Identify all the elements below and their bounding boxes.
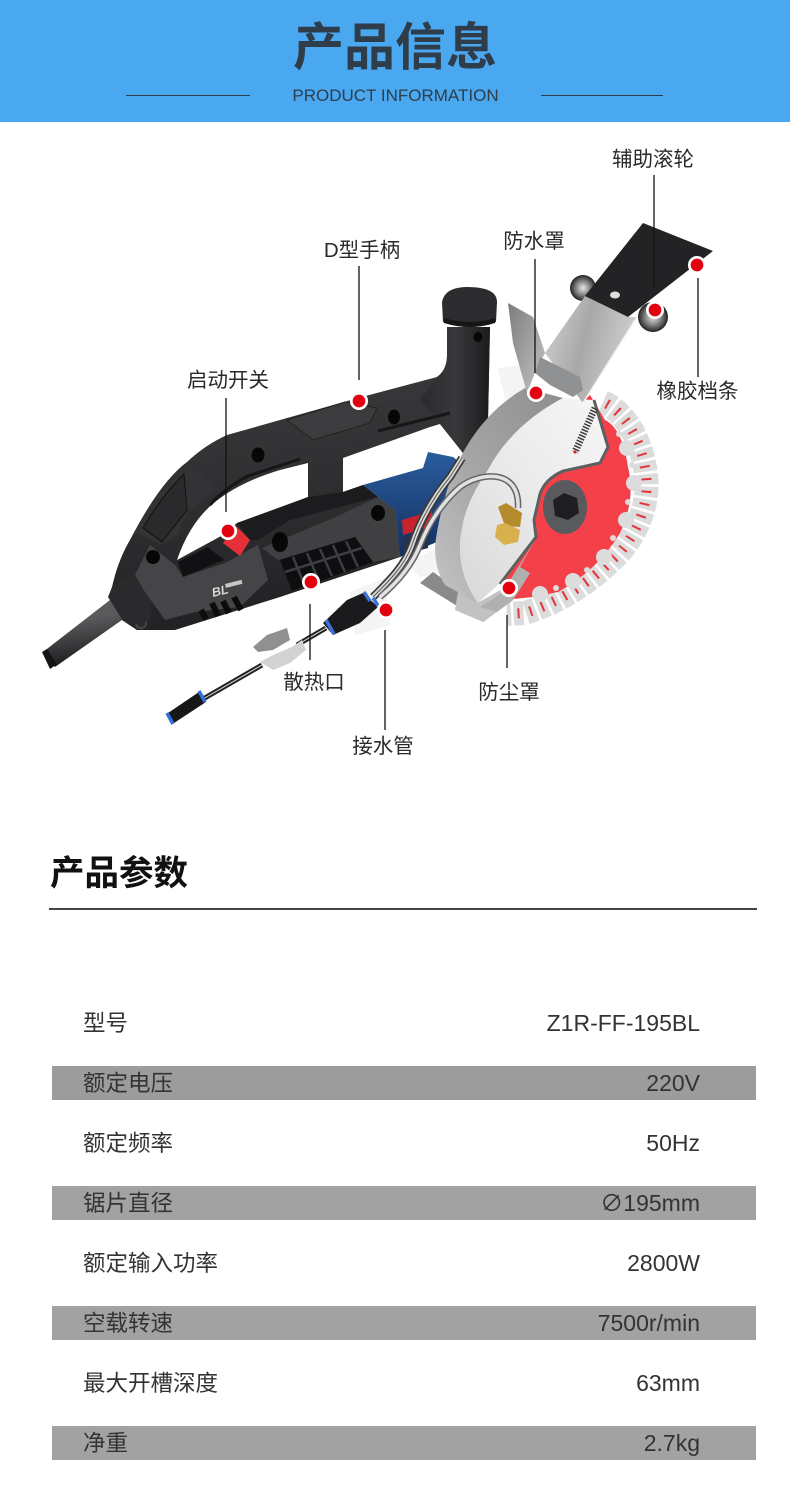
water hoses [373, 458, 518, 597]
switch recess [178, 547, 224, 577]
base plate [420, 572, 530, 622]
body top rim [237, 485, 378, 540]
silver arm [545, 296, 637, 403]
spec table: 额定输入功率 [83, 1251, 218, 1276]
blade tooth roots [532, 431, 642, 602]
lower hose [203, 665, 262, 699]
background speckle [350, 365, 526, 635]
black plate [585, 223, 713, 317]
brand label [402, 511, 432, 535]
right roller [638, 302, 668, 332]
spec table: 220V [646, 1070, 701, 1096]
BL badge: BL [210, 582, 230, 600]
handle cap [442, 287, 497, 327]
spec table: 最大开槽深度 [83, 1371, 218, 1396]
callout labels [187, 148, 738, 758]
spec table: ∅195mm [600, 1190, 700, 1216]
subtitle: PRODUCT INFORMATION [292, 86, 499, 105]
spring [575, 408, 595, 452]
brass fitting [495, 503, 522, 545]
blade red disc [500, 395, 631, 600]
lower body panel [135, 545, 268, 620]
spec table: 63mm [636, 1370, 700, 1396]
water connector [323, 593, 378, 635]
title: 产品信息 [293, 19, 497, 76]
callout labels: 散热口 [283, 671, 345, 694]
header banner [0, 0, 790, 122]
callout labels: 辅助滚轮 [612, 148, 694, 171]
callout labels: 启动开关 [187, 369, 269, 392]
spec table: 型号 [83, 1011, 128, 1036]
right body panel [262, 497, 400, 562]
grip texture [135, 468, 215, 545]
nozzle collar [108, 575, 152, 630]
clamp bolt [535, 357, 583, 397]
valve [253, 628, 306, 670]
small vents [201, 597, 241, 619]
spec table: 额定频率 [83, 1131, 173, 1156]
thin hose [297, 628, 326, 645]
handle panel [287, 402, 377, 440]
guard face [460, 398, 607, 603]
left roller [570, 275, 596, 301]
heat vents [280, 537, 373, 591]
spec table: 7500r/min [598, 1310, 700, 1336]
nozzle [43, 600, 122, 667]
spec table [52, 1010, 756, 1460]
spec table: 空载转速 [83, 1311, 173, 1336]
callout dots [220, 257, 705, 618]
callout labels: 橡胶档条 [656, 380, 738, 403]
spec table: 净重 [83, 1431, 128, 1456]
spec table: 额定电压 [83, 1071, 173, 1096]
spec table: 50Hz [646, 1130, 700, 1156]
spec table: 2.7kg [644, 1430, 700, 1456]
callout labels: 接水管 [352, 735, 414, 758]
blade teeth [507, 402, 647, 614]
red switch [223, 527, 250, 556]
tool body and D handle [112, 327, 490, 630]
spec table: 2800W [627, 1250, 700, 1276]
water shield [508, 303, 545, 393]
nut [553, 493, 579, 520]
neck [420, 327, 490, 453]
handle channels [210, 413, 450, 505]
callout lines [226, 175, 698, 730]
product illustration: wall chaser [42, 223, 713, 724]
motor housing [363, 452, 470, 557]
lower connector [168, 692, 206, 723]
guard inner edge [500, 400, 608, 584]
callout labels: 防水罩 [503, 230, 565, 253]
callout labels: D型手柄 [324, 239, 400, 262]
callout labels: 防尘罩 [478, 681, 540, 704]
lower dust cover strip [480, 540, 535, 612]
spec table: 锯片直径 [83, 1191, 173, 1216]
handle and body holes [146, 332, 482, 564]
hub [543, 480, 587, 534]
spec table: Z1R-FF-195BL [547, 1010, 700, 1036]
section heading: 产品参数 [50, 855, 188, 893]
guard rim [435, 388, 563, 603]
